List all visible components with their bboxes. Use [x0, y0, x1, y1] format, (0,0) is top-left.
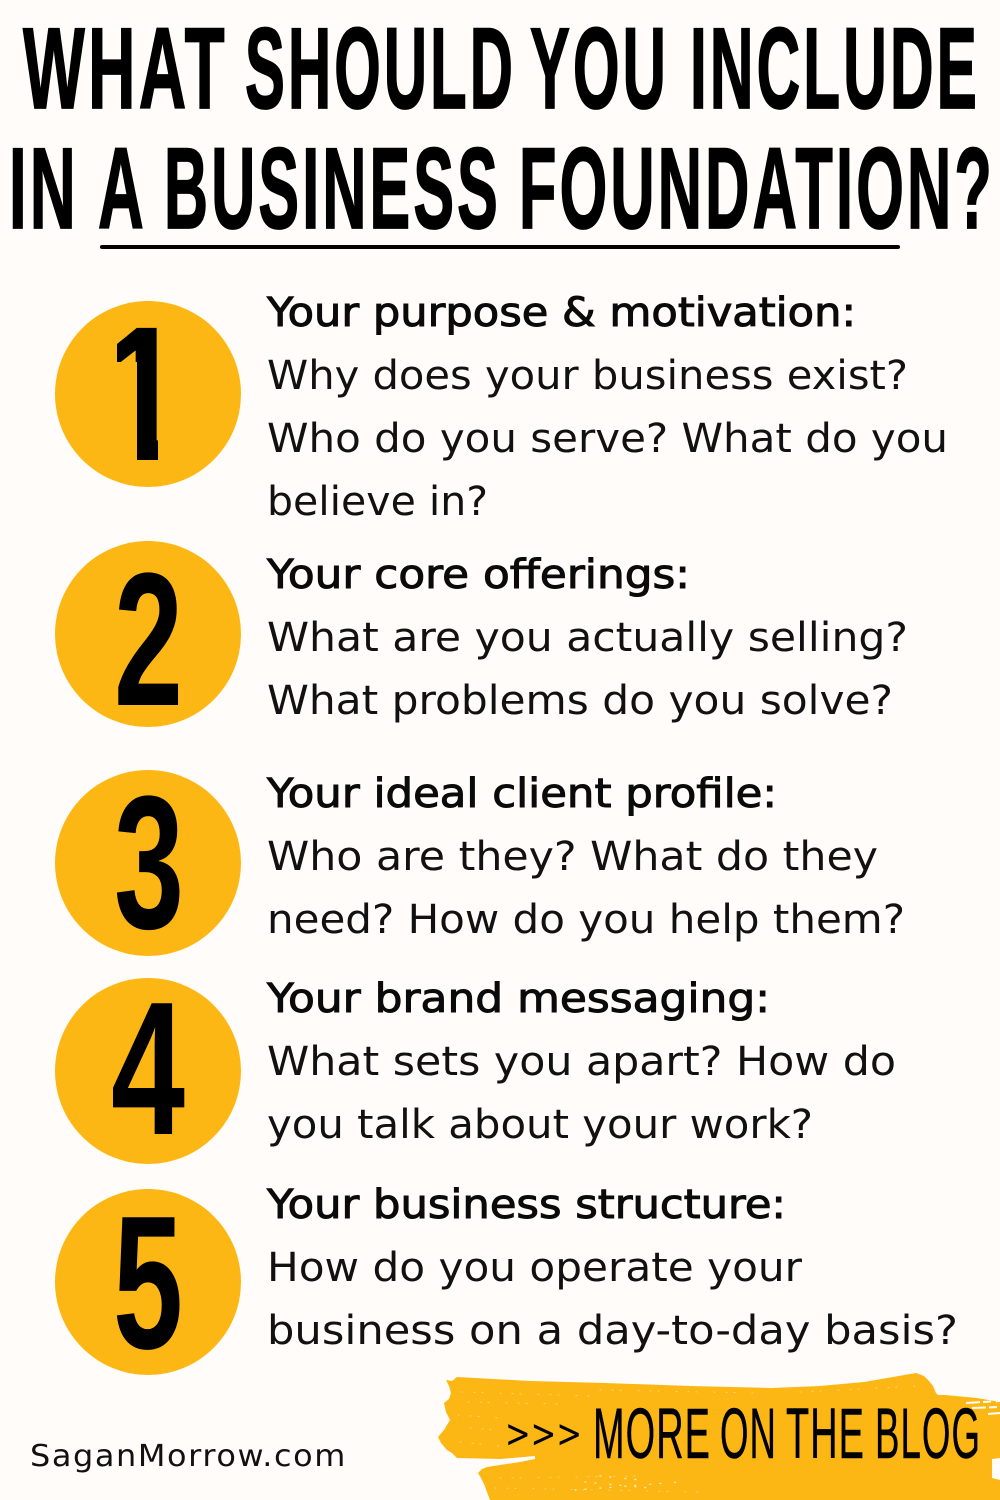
- item 3 text: Who are they? What do they: [267, 834, 878, 880]
- call-to-action label: MORE: [593, 1395, 711, 1474]
- item 1 text: Your purpose & motivation:: [266, 290, 856, 336]
- number badge 4: 4: [111, 963, 185, 1175]
- title: SHOULD: [245, 5, 516, 133]
- item 5 text: [266, 1182, 958, 1354]
- item 5 text: Your business structure:: [266, 1182, 786, 1228]
- item 3 text: need? How do you help them?: [267, 897, 905, 943]
- item 5 text: How do you operate your: [267, 1245, 803, 1291]
- call-to-action label: THE: [786, 1395, 865, 1474]
- brush stroke: [438, 1373, 1000, 1500]
- item 4: brand messaging: [55, 963, 896, 1175]
- number badge 3: 3: [114, 757, 184, 969]
- item 1 text: Why does your business exist?: [267, 353, 908, 399]
- item 4 text: you talk about your work?: [267, 1102, 813, 1148]
- item 5: business structure: [55, 1177, 958, 1389]
- number badge 1: 1: [100, 286, 185, 501]
- title: A: [98, 125, 147, 253]
- item 4 text: What sets you apart? How do: [267, 1039, 896, 1085]
- item 5 text: business on a day-to-day basis?: [267, 1308, 958, 1354]
- number badge 2: [55, 534, 241, 746]
- title: WHAT: [23, 5, 228, 133]
- title: [9, 5, 995, 253]
- item 3: ideal client profile: [55, 757, 905, 969]
- item 2 text: What are you actually selling?: [267, 615, 908, 661]
- item 1 text: [266, 290, 948, 525]
- title: YOU: [530, 5, 669, 133]
- item 3 text: [266, 771, 905, 943]
- brush stroke call-to-action: [438, 1373, 1000, 1500]
- number badge 5: 5: [113, 1177, 183, 1389]
- item 2 text: What problems do you solve?: [267, 678, 893, 724]
- item 4 text: Your brand messaging:: [266, 976, 770, 1022]
- item 1 text: Who do you serve? What do you: [267, 416, 948, 462]
- number badge 1: [55, 301, 241, 487]
- call-to-action label: [505, 1395, 981, 1474]
- number badge 2: 2: [114, 534, 183, 746]
- item 2 text: [266, 552, 908, 724]
- number badge 4: [55, 963, 241, 1175]
- number badge 5: [55, 1177, 241, 1389]
- website credit: SaganMorrow.com: [30, 1439, 347, 1474]
- item 2 text: Your core offerings:: [266, 552, 690, 598]
- call-to-action label: ON: [720, 1395, 777, 1474]
- item 1: purpose and motivation: [55, 286, 948, 525]
- title: IN: [9, 125, 79, 253]
- title underline: [100, 245, 900, 249]
- number badge 3: [55, 757, 241, 969]
- item 3 text: Your ideal client profile:: [266, 771, 777, 817]
- item 4 text: [266, 976, 896, 1148]
- item 2: core offerings: [55, 534, 908, 746]
- call-to-action label: >>>: [505, 1412, 582, 1457]
- item 1 text: believe in?: [267, 479, 488, 525]
- title: BUSINESS: [164, 125, 501, 253]
